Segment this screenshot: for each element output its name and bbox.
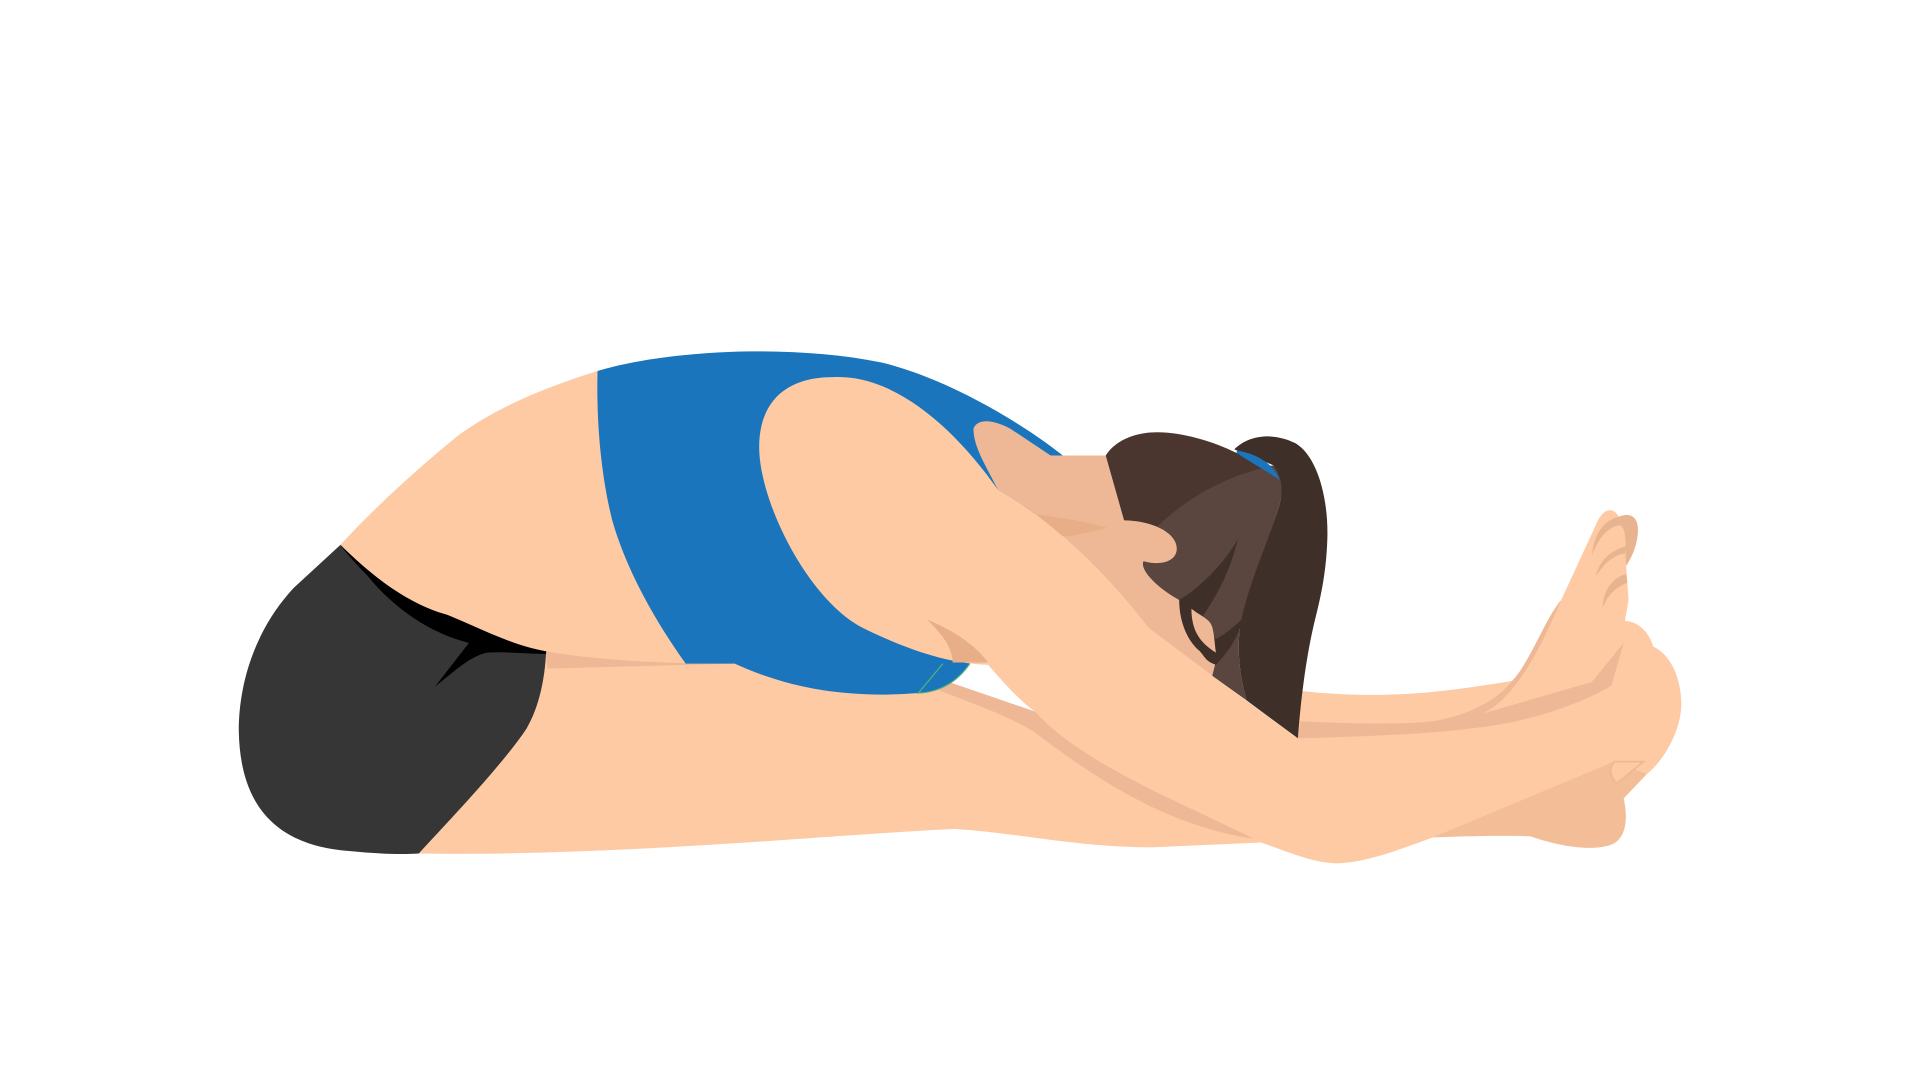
- near thigh and leg: [419, 651, 1347, 854]
- shadow on far leg and foot edge: [1298, 600, 1624, 738]
- torso: [340, 371, 686, 667]
- shorts: [239, 545, 546, 854]
- shadow under arm: [927, 620, 988, 662]
- fingers detail at heel: [1610, 762, 1643, 784]
- shadow under torso: [546, 651, 735, 669]
- arm reaching to foot: [759, 377, 1681, 863]
- ear: [1108, 520, 1177, 566]
- shadow along thigh: [937, 682, 1264, 840]
- hair: [1106, 432, 1327, 738]
- near heel in shadow: [1427, 759, 1647, 848]
- far leg and foot: [1298, 510, 1681, 798]
- blue sports top: [597, 351, 1063, 695]
- neck and face: [973, 421, 1216, 676]
